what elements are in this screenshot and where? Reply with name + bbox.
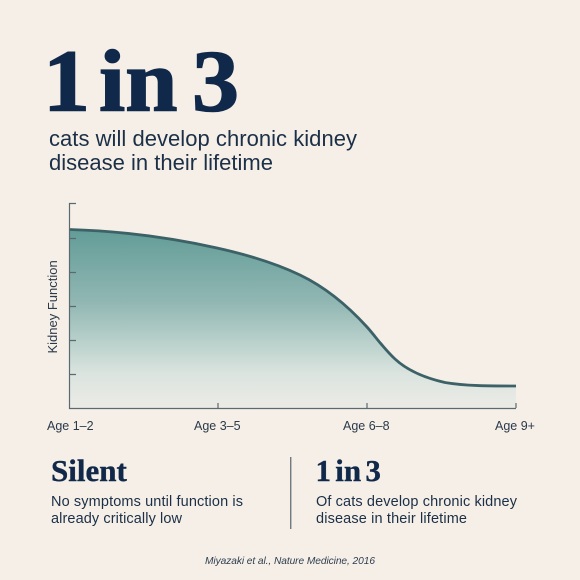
title: 1 in 3: 3 bbox=[192, 32, 239, 130]
x axis label: Age 3–5: Age 3–5 bbox=[194, 419, 241, 433]
stat: Silent: Silent bbox=[51, 453, 127, 488]
vertical separator bbox=[290, 457, 291, 529]
title: 1 in 3: 1 bbox=[43, 32, 90, 130]
y axis label: Kidney Function bbox=[45, 260, 60, 354]
subtitle: disease in their lifetime bbox=[49, 150, 273, 175]
stat: 1 in 3: Of cats develop chronic kidney bbox=[316, 494, 518, 510]
kidney function curve bbox=[70, 230, 516, 386]
chart: kidney function decline by age bbox=[45, 204, 535, 433]
x axis label: Age 9+: Age 9+ bbox=[495, 419, 535, 433]
stat: Silent: No symptoms until function is bbox=[51, 494, 243, 510]
stat: 1 in 3 bbox=[316, 453, 518, 527]
stat: Silent bbox=[51, 453, 243, 527]
axes and ticks bbox=[70, 204, 516, 408]
stat: 1 in 3: disease in their lifetime bbox=[316, 511, 467, 527]
x axis label: Age 1–2: Age 1–2 bbox=[47, 419, 94, 433]
stat: Silent: already critically low bbox=[51, 511, 183, 527]
subtitle bbox=[49, 126, 357, 175]
stat: 1 in 3: 1 in 3 bbox=[316, 453, 381, 488]
x axis label: Age 6–8: Age 6–8 bbox=[343, 419, 390, 433]
source citation: Miyazaki et al., Nature Medicine, 2016 bbox=[205, 556, 375, 567]
subtitle: cats will develop chronic kidney bbox=[49, 126, 357, 151]
title: 1 in 3: in bbox=[99, 32, 178, 130]
area under curve bbox=[70, 230, 516, 408]
title: 1 in 3 bbox=[43, 32, 239, 130]
